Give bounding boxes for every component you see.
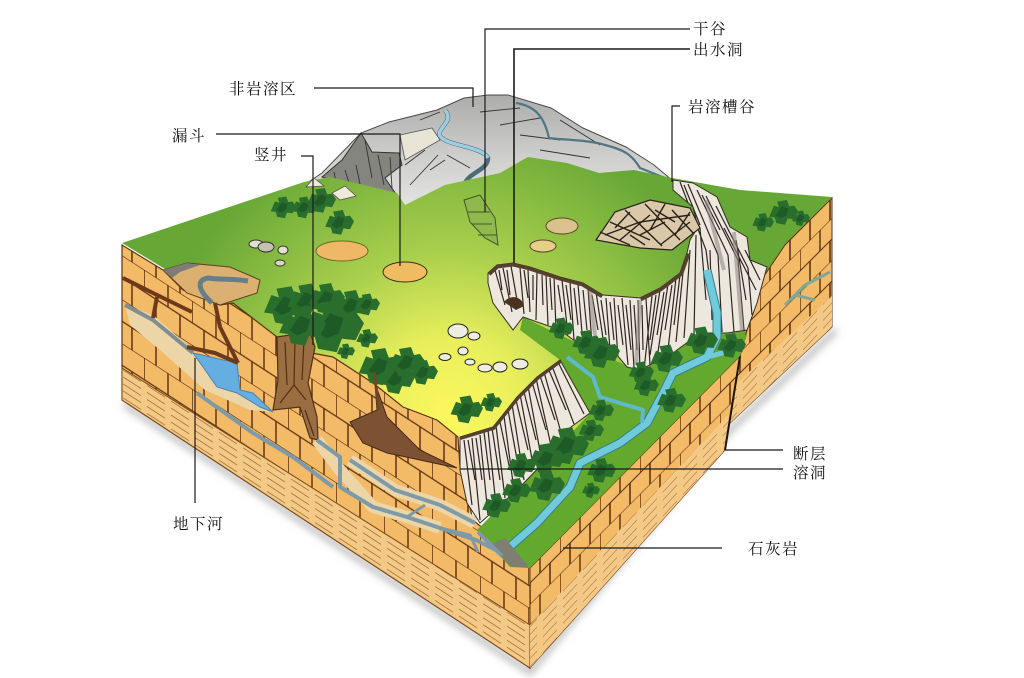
label: cave: 溶洞 xyxy=(793,464,827,482)
lower limestone band xyxy=(530,414,729,668)
lower cliff stripes xyxy=(464,362,584,520)
vertical shaft xyxy=(273,332,318,440)
drop shadow xyxy=(124,330,836,672)
label: non-karst area: 非岩溶区 xyxy=(229,80,297,98)
brown fracture cracks xyxy=(123,278,238,363)
cliff brown rim xyxy=(488,253,687,298)
leader lines xyxy=(195,29,783,548)
panel: plateau top surface xyxy=(122,157,832,568)
river mouth branch xyxy=(707,349,738,357)
main river xyxy=(490,270,738,568)
karst landscape block diagram xyxy=(120,21,840,678)
panel: right brick face front xyxy=(530,356,740,668)
lower cliff rim xyxy=(460,360,560,437)
lower underground river xyxy=(197,393,500,552)
cliff stripes xyxy=(495,182,760,372)
shaft grain xyxy=(280,340,314,436)
label: funnel: 漏斗 xyxy=(172,127,206,145)
valley mouth rock xyxy=(490,538,530,568)
label: dry valley: 干谷 xyxy=(693,20,727,38)
tree trunks xyxy=(374,372,379,410)
underground blue lake xyxy=(193,353,273,412)
label: fault: 断层 xyxy=(793,445,827,463)
fault line xyxy=(725,356,740,450)
label: underground river: 地下河 xyxy=(173,514,224,533)
label: outlet cave: 出水洞 xyxy=(693,41,744,59)
panel: lower gorge cliff xyxy=(460,360,590,523)
label: limestone: 石灰岩 xyxy=(748,540,799,558)
tan cave wall xyxy=(125,305,273,412)
icon: outlet cave xyxy=(504,297,524,310)
light ledge xyxy=(400,128,440,160)
second cave xyxy=(350,383,457,468)
limestone bottom band xyxy=(122,368,530,668)
rock pile xyxy=(596,200,700,250)
doline rock edge xyxy=(163,263,200,278)
mountain stream one xyxy=(439,110,488,183)
rear cave stream xyxy=(785,272,830,305)
panel: right brick face rear xyxy=(725,198,832,450)
river branches xyxy=(407,505,478,552)
upper underground stream xyxy=(125,305,193,353)
cave river start xyxy=(478,532,502,556)
panel: mountain non-karst area xyxy=(304,95,672,210)
cliff grey shading xyxy=(590,200,742,365)
dry valley sketch xyxy=(464,195,498,245)
mountain stream two xyxy=(516,103,670,180)
rocks: pond and pebbles on plateau xyxy=(249,178,578,372)
rear limestone band xyxy=(730,296,832,423)
rock cracks xyxy=(334,108,600,188)
tributary xyxy=(567,357,643,423)
panel: left brick face xyxy=(122,245,530,668)
doline sand basin xyxy=(163,263,260,305)
panel: upper gorge cliff xyxy=(488,180,767,372)
pale rock along river xyxy=(317,440,475,528)
label: shaft: 竖井 xyxy=(254,146,288,164)
dark rock face xyxy=(322,133,402,200)
trees on plateau and valley xyxy=(264,188,810,518)
label: karst trough valley: 岩溶槽谷 xyxy=(688,98,756,116)
panel: valley floor xyxy=(477,317,747,568)
doline stream xyxy=(200,278,248,303)
